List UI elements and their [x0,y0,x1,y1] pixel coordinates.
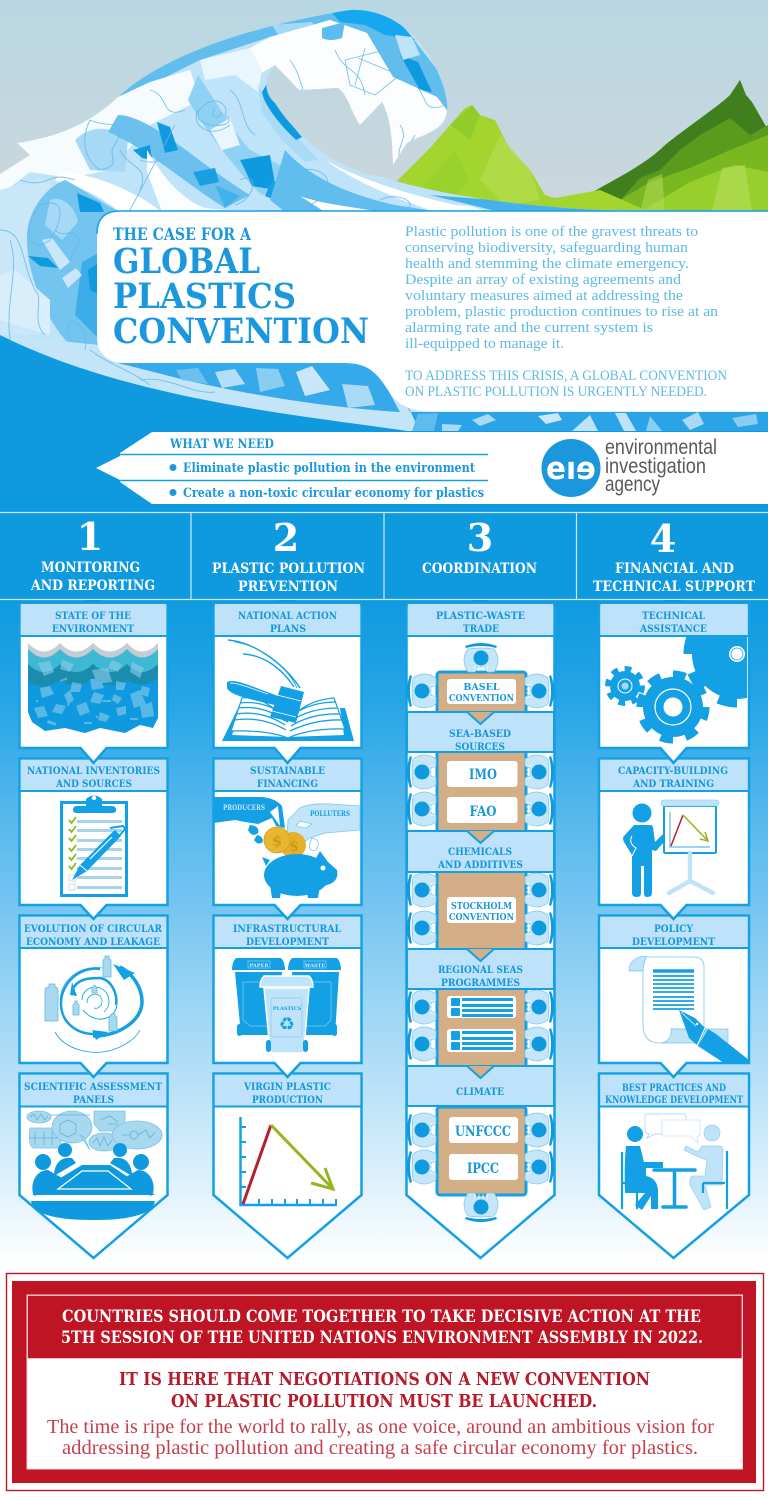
card: policy development: POLICY [654,923,693,935]
icon: scientists around a table with speech bubbles [27,1111,162,1220]
card: sustainable financing [214,758,362,919]
card: virgin plastic production: PRODUCTION [252,1094,323,1106]
card: infrastructural development [214,916,362,1077]
wave of plastic [0,0,768,440]
icon: hands dropping coins into piggy bank: $ [272,832,282,850]
logo: environmental investigation agency: agency [605,473,660,496]
table 2 and seats: IMO [469,767,497,783]
icon: interlocking gears [605,637,747,744]
label band: plastic-waste trade [407,604,554,636]
table 2 and seats [407,752,554,832]
icon: hands dropping coins into piggy bank [214,797,360,898]
intro paragraph: health and stemming the climate emergency. [405,256,689,272]
card: sustainable financing: FINANCING [257,778,318,790]
icon: three recycling bins: WASTE [304,963,325,969]
header 3: COORDINATION [422,561,537,577]
card: state of the environment [20,604,168,763]
table 3 and seats: CONVENTION [449,912,514,923]
solid blue lower wave [0,335,768,513]
header 4: FINANCIAL AND [615,561,734,577]
title: THE CASE FOR A [113,225,251,244]
white swooshes [55,172,162,212]
logo: environmental investigation agency: eıɘ [546,451,596,487]
continuous panel outline [406,604,554,1258]
call to action body: addressing plastic pollution and creating a safe circular economy for plastics. [62,1437,698,1459]
header 4 [593,516,756,595]
card: national inventories and sources: AND SOURCES [55,778,132,790]
card: technical assistance: TECHNICAL [642,610,706,622]
column 2: plastic pollution prevention [214,604,362,1258]
header 3: 3 [467,515,493,560]
table 3 and seats [407,872,554,949]
icon: ocean full of plastic [28,643,158,733]
logo: environmental investigation agency [542,436,717,497]
card: state of the environment: ENVIRONMENT [52,623,134,635]
icon: three recycling bins: ♻ [279,1014,295,1035]
intro paragraph: TO ADDRESS THIS CRISIS, A GLOBAL CONVENTION [405,368,727,384]
intro panel [97,211,768,412]
call to action subheading: ON PLASTIC POLLUTION MUST BE LAUNCHED. [171,1391,597,1412]
card: virgin plastic production: VIRGIN PLASTIC [243,1081,331,1093]
icon: scroll and fountain pen [629,956,749,1063]
card: technical assistance [599,604,768,763]
icon: gavel striking open book [222,640,354,741]
icon: spiral of bottles [45,956,142,1052]
ribbon heading: WHAT WE NEED [169,437,274,452]
label band: chemicals and additives: AND ADDITIVES [437,859,523,871]
table 1 and seats [407,643,554,732]
label band: plastic-waste trade: PLASTIC-WASTE [436,610,525,622]
label band: sea-based sources: SEA-BASED [449,728,511,740]
white foam fingers [250,20,447,165]
header 4: TECHNICAL SUPPORT [593,579,756,595]
card: scientific assessment panels [20,1074,168,1258]
intro paragraph: Plastic pollution is one of the gravest threats to [405,224,698,240]
title [113,225,369,352]
header 3 [422,515,537,577]
card: best practices and knowledge development [599,1074,749,1258]
header 1 [30,514,155,594]
card: virgin plastic production [214,1074,362,1258]
card: scientific assessment panels: SCIENTIFIC ASSESSMENT [24,1081,162,1093]
what we need ribbon [96,432,768,504]
header 2: PREVENTION [238,579,338,595]
column 4: financial and technical support [599,604,768,1258]
header 4: 4 [650,516,676,561]
icon: hands dropping coins into piggy bank: $ [289,837,299,855]
table 3 and seats: STOCKHOLM [451,901,512,912]
table 1 and seats: BASEL [463,682,500,693]
label band: regional seas programmes [407,949,554,989]
card: national action plans: PLANS [270,623,306,635]
icon: hands dropping coins into piggy bank: POLLUTERS [310,809,350,818]
chart: production falling after peak [240,1117,337,1205]
label band: chemicals and additives [407,831,554,872]
card: state of the environment: STATE OF THE [55,610,131,622]
header 2: 2 [273,515,299,560]
intro paragraph [405,224,727,400]
intro paragraph: ON PLASTIC POLLUTION IS URGENTLY NEEDED. [405,384,707,400]
crest colours [118,10,448,112]
logo: environmental investigation agency: environmental [605,436,717,459]
logo: environmental investigation agency: investigation [605,455,706,478]
card: capacity-building and training: AND TRAINING [632,778,714,790]
need 1: Eliminate plastic pollution in the environment [183,461,475,476]
call to action headline band [28,1296,742,1358]
title: GLOBAL [113,242,260,282]
title: CONVENTION [113,312,369,352]
title: PLASTICS [113,277,296,317]
band below panel [66,342,101,360]
header 1: AND REPORTING [30,578,155,594]
header 2 [212,515,365,595]
card: scientific assessment panels: PANELS [73,1094,114,1106]
card: national inventories and sources [20,758,168,919]
icon: three recycling bins [232,958,341,1053]
sky [0,0,768,215]
card: sustainable financing: SUSTAINABLE [250,765,325,777]
card: national action plans: NATIONAL ACTION [238,610,337,622]
intro paragraph: alarming rate and the current system is [405,320,653,336]
call to action subheading [119,1369,650,1412]
plastic outlines [0,48,519,392]
card: national inventories and sources: NATIONAL INVENTORIES [27,765,160,777]
left foam [0,70,200,195]
header 1: 1 [77,514,103,559]
card: infrastructural development: INFRASTRUCTURAL [233,923,342,935]
table 5 and seats: IPCC [467,1161,499,1177]
icon: presenter with flipchart [623,800,719,897]
low-left region [0,178,53,335]
column 1: monitoring and reporting [20,604,168,1258]
mountains [397,80,768,212]
icon: three recycling bins: PLASTICS [273,1006,302,1012]
call to action [6,1274,764,1490]
card: infrastructural development: DEVELOPMENT [246,936,329,948]
card: evolution of circular economy and leakage: ECONOMY AND LEAKAGE [26,936,160,948]
table 4 and seats [407,989,554,1067]
icon: three recycling bins: PAPER [249,963,269,969]
label band: climate [407,1066,554,1106]
pillar headers [0,512,768,608]
card: capacity-building and training [599,758,749,919]
label band: sea-based sources [407,712,554,753]
label band: chemicals and additives: CHEMICALS [448,846,512,858]
table 5 and seats: UNFCCC [455,1124,511,1140]
label band: sea-based sources: SOURCES [455,741,505,753]
table 2 and seats: FAO [470,804,496,820]
label band: climate: CLIMATE [456,1086,504,1098]
card: policy development: DEVELOPMENT [632,936,715,948]
card: national action plans [214,604,362,763]
label band: regional seas programmes: REGIONAL SEAS [438,964,523,976]
card: policy development [599,916,749,1077]
need 2: Create a non-toxic circular economy for plastics [183,486,484,501]
table 1 and seats: CONVENTION [449,693,514,704]
card: capacity-building and training: CAPACITY-BUILDING [618,765,728,777]
icon: two people talking at a table [621,1114,727,1210]
call to action body: The time is ripe for the world to rally, as one voice, around an ambitious vision for [47,1416,714,1438]
table 5 and seats [407,1107,554,1222]
column 3: coordination [406,604,554,1258]
header 2: PLASTIC POLLUTION [212,561,365,577]
intro paragraph: problem, plastic production continues to rise at an [405,304,719,320]
card: best practices and knowledge development: BEST PRACTICES AND [622,1082,726,1094]
call to action body [47,1416,714,1459]
card: evolution of circular economy and leakage: EVOLUTION OF CIRCULAR [24,923,162,935]
icon: clipboard checklist and pen [62,796,126,896]
call to action subheading: IT IS HERE THAT NEGOTIATIONS ON A NEW CONVENTION [119,1369,650,1390]
intro paragraph: conserving biodiversity, safeguarding human [405,240,689,256]
label band: plastic-waste trade: TRADE [463,623,499,635]
icon: hands dropping coins into piggy bank: PRODUCERS [223,803,265,812]
header 1: MONITORING [41,560,140,576]
intro paragraph: ill-equipped to manage it. [405,336,564,352]
label band: regional seas programmes: PROGRAMMES [441,977,520,989]
card: evolution of circular economy and leakage [20,916,168,1077]
intro paragraph: Despite an array of existing agreements and [405,272,682,288]
intro paragraph: voluntary measures aimed at addressing the [405,288,683,304]
card: technical assistance: ASSISTANCE [639,623,707,635]
page background gradient [0,600,768,1262]
mid wave tones [75,129,128,172]
